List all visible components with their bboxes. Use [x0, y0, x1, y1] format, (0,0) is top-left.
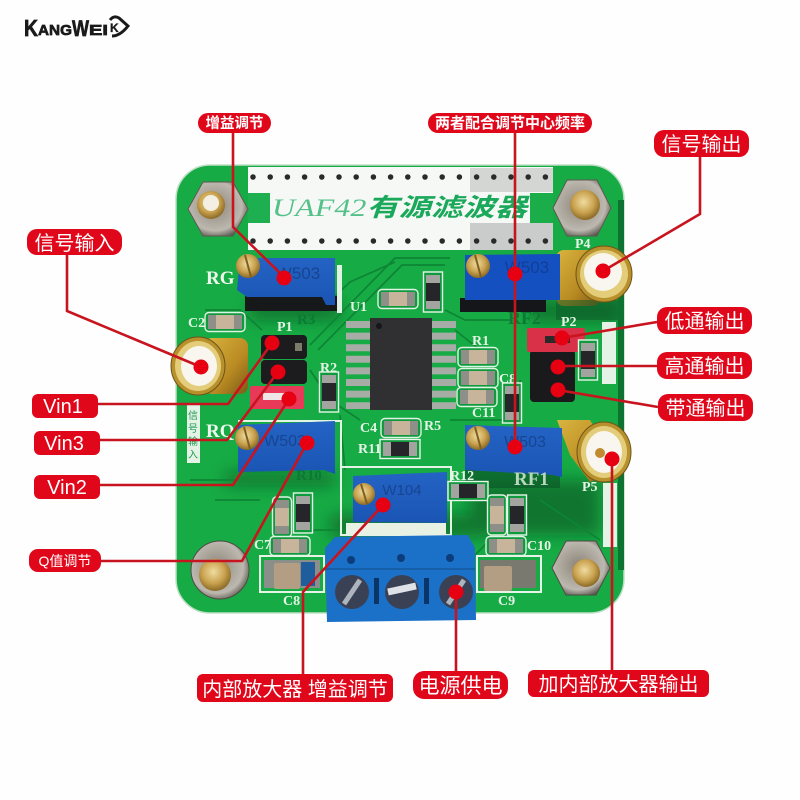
mounting screw: bottom left — [191, 541, 249, 599]
logo: KangWei — [24, 15, 128, 41]
smd parts — [205, 272, 598, 592]
callout: Q值调节: Q值调节 — [39, 553, 91, 569]
silkscreen labels: RF1 — [514, 469, 549, 490]
silkscreen labels: R11 — [358, 442, 381, 457]
board title: UAF42 有源滤波器 — [272, 194, 531, 222]
sma connector: internal amplifier output — [557, 420, 631, 482]
callout: 信号输出: 信号输出 — [662, 133, 742, 156]
silk side strips: 号 — [188, 420, 198, 435]
pcb board — [171, 165, 632, 622]
silkscreen labels: C11 — [472, 406, 495, 421]
silkscreen labels: RQ — [206, 421, 234, 442]
silkscreen labels: R2 — [320, 361, 337, 376]
jumpers: P2 — [527, 328, 585, 402]
callout: Q值调节 — [29, 436, 314, 572]
trimpot: RF2 — [460, 254, 560, 312]
callout: 增益调节: 增益调节 — [206, 114, 264, 132]
board right edge — [618, 200, 624, 570]
trimpot: RF1 — [465, 425, 562, 488]
silkscreen labels: C2 — [188, 316, 205, 331]
callout: 低通输出 — [554, 307, 752, 346]
trimpot: RG — [236, 254, 342, 313]
callout: 低通输出: 低通输出 — [664, 310, 744, 333]
callout: 带通输出: 带通输出 — [666, 397, 746, 420]
silkscreen labels: C7 — [254, 538, 271, 553]
callout: 高通输出: 高通输出 — [664, 355, 744, 378]
mounting screw: top right — [553, 180, 611, 236]
callout: 电源供电: 电源供电 — [418, 675, 502, 698]
silkscreen labels: RG — [206, 268, 235, 289]
callout: 电源供电 — [413, 584, 508, 699]
jumpers: P1 and P3 — [250, 335, 307, 409]
silkscreen labels: C8 — [499, 372, 516, 387]
callout: 加内部放大器输出: 加内部放大器输出 — [538, 673, 698, 696]
ic chip: UAF42 — [358, 318, 444, 410]
callout: 内部放大器 增益调节: 内部放大器 增益调节 — [202, 678, 388, 701]
board shadows — [225, 300, 620, 537]
trimpot: inner amplifier gain: W104 — [382, 482, 422, 499]
silkscreen labels: C8 — [283, 594, 300, 609]
silkscreen labels: R10 — [296, 468, 322, 484]
logo: KangWei: ANG — [38, 22, 72, 39]
capacitor C8 — [260, 556, 324, 592]
callout: Vin1 — [32, 336, 280, 418]
trimpot: inner amplifier gain — [341, 467, 451, 535]
callout: 两者配合调节中心频率 — [428, 113, 592, 454]
callout: 带通输出 — [550, 382, 753, 421]
logo: KangWei: K — [24, 15, 38, 41]
terminal block — [325, 535, 476, 622]
board base — [176, 165, 624, 613]
callout: Vin2 — [34, 392, 296, 499]
trimpot: RF2: W503 — [505, 258, 549, 277]
callout: 高通输出 — [550, 352, 752, 379]
copper traces — [190, 258, 600, 560]
trimpot: RQ — [235, 421, 341, 474]
silkscreen labels: RF2 — [508, 308, 541, 328]
callout: 信号输出 — [596, 130, 749, 278]
trimpot: RG: W503 — [276, 264, 320, 283]
trimpot: RF1: W503 — [504, 434, 546, 451]
callout: Vin3: Vin3 — [44, 433, 84, 455]
callout: Vin3 — [34, 364, 286, 455]
silkscreen labels: R3 — [297, 312, 315, 328]
silkscreen labels: P1 — [277, 320, 293, 335]
silk side strips — [187, 322, 617, 547]
silkscreen labels: C10 — [527, 539, 551, 554]
silk side strips: 输 — [188, 433, 198, 448]
silk side strips: 信 — [188, 407, 198, 422]
logo: KangWei: W — [72, 16, 89, 41]
callout: 信号输入: 信号输入 — [34, 232, 114, 255]
callout: Vin2: Vin2 — [47, 477, 87, 499]
callout: 信号输入 — [27, 229, 208, 374]
silkscreen labels — [188, 237, 598, 609]
logo: KangWei: K — [110, 21, 119, 35]
silkscreen labels: P5 — [582, 480, 598, 495]
callout: 增益调节 — [198, 113, 292, 286]
callout: 两者配合调节中心频率: 两者配合调节中心频率 — [435, 114, 585, 132]
callout: 加内部放大器输出 — [528, 452, 709, 697]
mounting screw: top left — [188, 182, 248, 236]
silkscreen labels: R12 — [450, 469, 474, 484]
silkscreen labels: C9 — [498, 594, 515, 609]
callout: 内部放大器 增益调节 — [197, 498, 393, 702]
silkscreen labels: R5 — [424, 419, 441, 434]
silk side strips: 入 — [188, 446, 198, 461]
callout: Vin1: Vin1 — [43, 396, 83, 418]
capacitor C9 — [477, 556, 541, 592]
silkscreen labels: C4 — [360, 421, 377, 436]
mounting screw: bottom right — [552, 541, 610, 595]
logo: KangWei: EI — [89, 22, 108, 39]
trimpot: RQ: W503 — [264, 433, 306, 450]
silkscreen labels: R1 — [472, 334, 489, 349]
header strip — [248, 167, 553, 250]
sma connector: signal input — [171, 337, 248, 395]
silkscreen labels: P4 — [575, 237, 591, 252]
sma connector: signal output — [556, 246, 632, 320]
silkscreen labels: P2 — [561, 315, 577, 330]
silkscreen labels: U1 — [350, 300, 367, 315]
